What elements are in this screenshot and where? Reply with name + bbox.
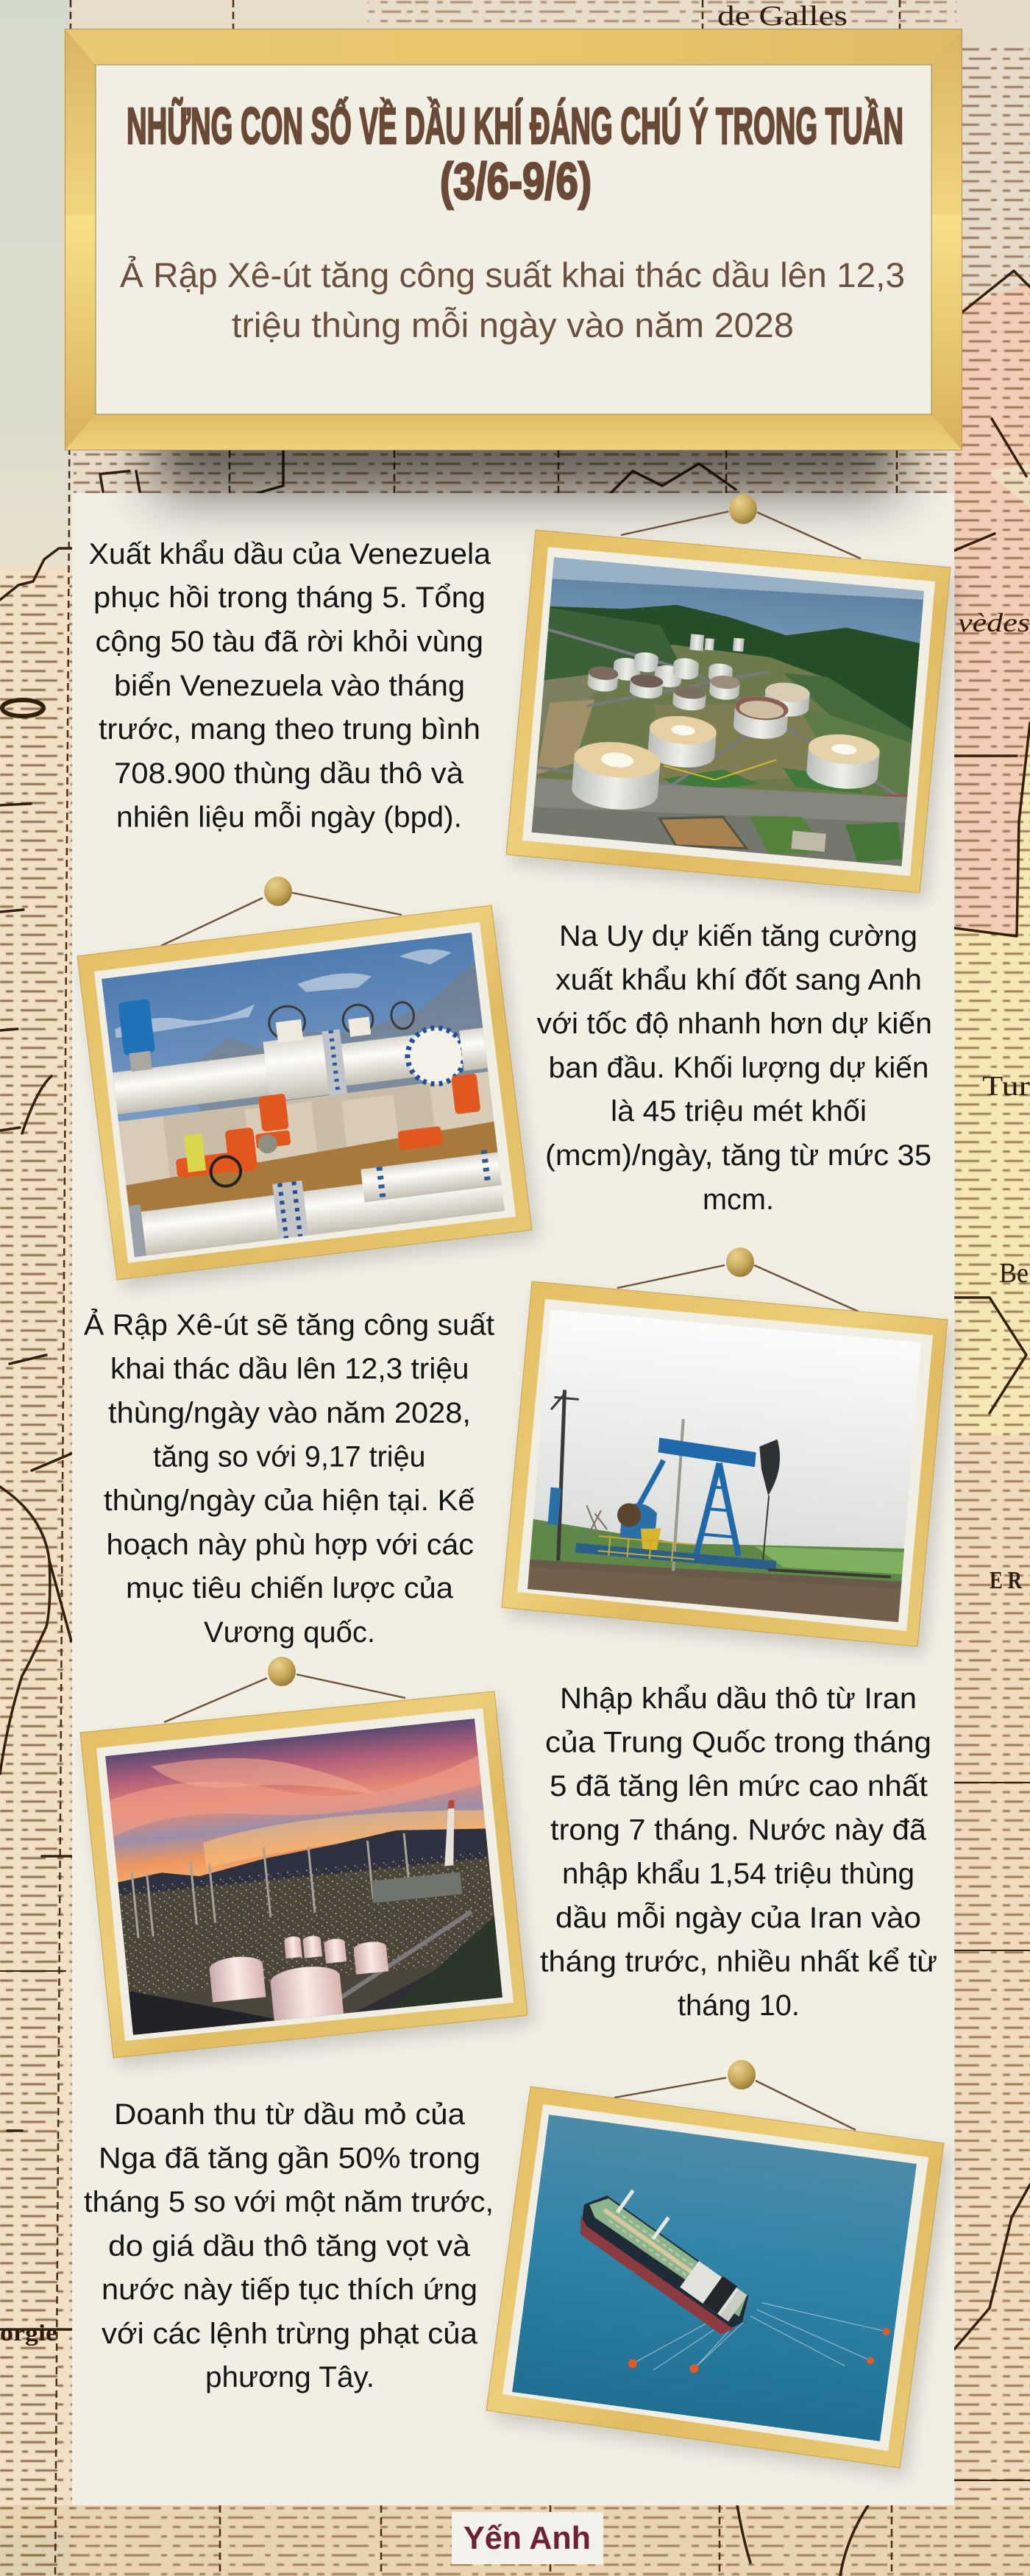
section 1 text: Venezuela: 708.900 thùng dầu thô và <box>114 757 464 790</box>
photo <box>528 1309 921 1622</box>
section 5 text: Russia revenue: Doanh thu từ dầu mỏ của <box>114 2098 466 2131</box>
frame shadow <box>83 914 538 1289</box>
mat <box>522 547 935 876</box>
content panel <box>72 493 954 2505</box>
picture 5: oil tanker at sea <box>486 2060 950 2477</box>
section 2 text: Norway: mcm. <box>703 1183 774 1216</box>
map place names: E R <box>990 1567 1022 1594</box>
header frame shadow <box>154 397 898 493</box>
section 2 text: Norway <box>537 920 932 1216</box>
title: (3/6-9/6) <box>440 152 592 210</box>
section 1 text: Venezuela: biển Venezuela vào tháng <box>114 670 465 702</box>
pin <box>728 2060 756 2090</box>
section 1 text: Venezuela: Xuất khẩu dầu của Venezuela <box>88 538 491 570</box>
map place names: vèdes <box>958 608 1030 637</box>
frame shadow <box>508 1290 953 1655</box>
section 3 text: Saudi Arabia: tăng so với 9,17 triệu <box>153 1441 425 1473</box>
map region: pink territory <box>954 283 1030 936</box>
subtitle: triệu thùng mỗi ngày vào năm 2028 <box>232 305 794 344</box>
section 1 text: Venezuela: cộng 50 tàu đã rời khỏi vùng <box>96 626 483 658</box>
section 4 text: China imports: trong 7 tháng. Nước này đã <box>550 1814 927 1847</box>
map region: grey-green top-left <box>0 0 71 567</box>
photo <box>105 1719 502 2035</box>
wooden frame <box>80 1691 528 2058</box>
section 3 text: Saudi Arabia: Vương quốc. <box>204 1616 375 1649</box>
section 2 text: Norway: (mcm)/ngày, tăng từ mức 35 <box>545 1139 931 1172</box>
mat <box>94 922 516 1263</box>
pin <box>268 1657 296 1686</box>
picture 1: oil storage terminal <box>506 495 956 902</box>
section 1 text: Venezuela: phục hồi trong tháng 5. Tổng <box>93 581 486 614</box>
section 1 text: Venezuela: trước, mang theo trung bình <box>99 713 480 746</box>
map place names: Be <box>999 1258 1029 1289</box>
section 3 text: Saudi Arabia: khai thác dầu lên 12,3 triệu <box>110 1353 469 1385</box>
mat <box>517 1299 933 1631</box>
section 3 text: Saudi Arabia: thùng/ngày của hiện tại. Kế <box>104 1485 475 1517</box>
wooden frame <box>506 530 951 893</box>
header panel <box>96 65 931 414</box>
section 3 text: Saudi Arabia: hoạch này phù hợp với các <box>106 1529 474 1561</box>
section 3 text: Saudi Arabia <box>84 1308 494 1649</box>
section 4 text: China imports <box>540 1682 937 2022</box>
hanging wire <box>621 512 861 559</box>
section 2 text: Norway: xuất khẩu khí đốt sang Anh <box>555 964 922 997</box>
section 4 text: China imports: tháng 10. <box>678 1989 800 2022</box>
section 4 text: China imports: 5 đã tăng lên mức cao nhất <box>550 1770 928 1802</box>
photo <box>512 2115 917 2441</box>
frame shadow <box>492 2095 950 2477</box>
section 5 text: Russia revenue <box>84 2098 494 2393</box>
map region: yellow territory <box>954 725 1030 1435</box>
hanging wire <box>617 1265 859 1312</box>
section 4 text: China imports: nhập khẩu 1,54 triệu thùng <box>562 1858 914 1890</box>
section 4 text: China imports: dầu mỗi ngày của Iran vào <box>555 1901 921 1934</box>
frame shadow <box>86 1700 533 2067</box>
photo <box>102 933 505 1257</box>
mat <box>502 2104 928 2451</box>
frame shadow <box>512 539 956 902</box>
section 2 text: Norway: ban đầu. Khối lượng dự kiến <box>549 1052 928 1084</box>
map place names: Tur <box>982 1071 1030 1102</box>
picture 4: refinery at sunset <box>80 1657 533 2067</box>
section 2 text: Norway: là 45 triệu mét khối <box>611 1095 867 1128</box>
section 5 text: Russia revenue: với các lệnh trừng phạt của <box>102 2318 478 2350</box>
section 2 text: Norway: Na Uy dự kiến tăng cường <box>559 920 917 952</box>
section 3 text: Saudi Arabia: Ả Rập Xê-út sẽ tăng công suất <box>84 1308 494 1342</box>
section 1 text: Venezuela: nhiên liệu mỗi ngày (bpd). <box>116 801 462 833</box>
section 4 text: China imports: tháng trước, nhiều nhất kể từ <box>540 1946 937 1978</box>
section 5 text: Russia revenue: nước này tiếp tục thích ứng <box>102 2274 477 2306</box>
picture 2: gas pipeline valves <box>77 877 538 1289</box>
header frame <box>65 29 962 450</box>
hanging wire <box>161 893 402 946</box>
section 5 text: Russia revenue: do giá dầu thô tăng vọt và <box>108 2230 471 2262</box>
mat <box>96 1708 514 2041</box>
pin <box>726 1248 754 1277</box>
subtitle <box>120 255 905 344</box>
section 4 text: China imports: của Trung Quốc trong tháng <box>545 1727 931 1759</box>
section 3 text: Saudi Arabia: mục tiêu chiến lược của <box>126 1572 454 1604</box>
section 2 text: Norway: với tốc độ nhanh hơn dự kiến <box>537 1008 932 1040</box>
photo <box>532 557 924 866</box>
pin <box>729 495 757 524</box>
frame: gold wood <box>65 29 962 450</box>
author tag: Yến Anh <box>464 2520 591 2556</box>
wooden frame <box>486 2087 944 2468</box>
section 5 text: Russia revenue: tháng 5 so với một năm trước, <box>84 2186 494 2218</box>
section 4 text: China imports: Nhập khẩu dầu thô từ Iran <box>560 1682 917 1715</box>
picture 3: pumpjack <box>502 1248 953 1655</box>
section 3 text: Saudi Arabia: thùng/ngày vào năm 2028, <box>108 1397 471 1429</box>
author tag <box>452 2512 603 2564</box>
title <box>127 96 903 210</box>
hanging wire <box>164 1674 405 1722</box>
map place names: orgie <box>0 2319 57 2346</box>
subtitle: Ả Rập Xê-út tăng công suất khai thác dầu lên 12,3 <box>120 255 905 294</box>
section 5 text: Russia revenue: Nga đã tăng gần 50% trong <box>99 2142 480 2175</box>
map place names: de Galles <box>717 1 848 32</box>
wooden frame <box>77 905 532 1280</box>
wooden frame <box>502 1281 948 1646</box>
section 1 text: Venezuela <box>88 538 491 833</box>
section 5 text: Russia revenue: phương Tây. <box>205 2361 374 2393</box>
hanging wire <box>614 2078 856 2130</box>
pin <box>264 877 292 906</box>
